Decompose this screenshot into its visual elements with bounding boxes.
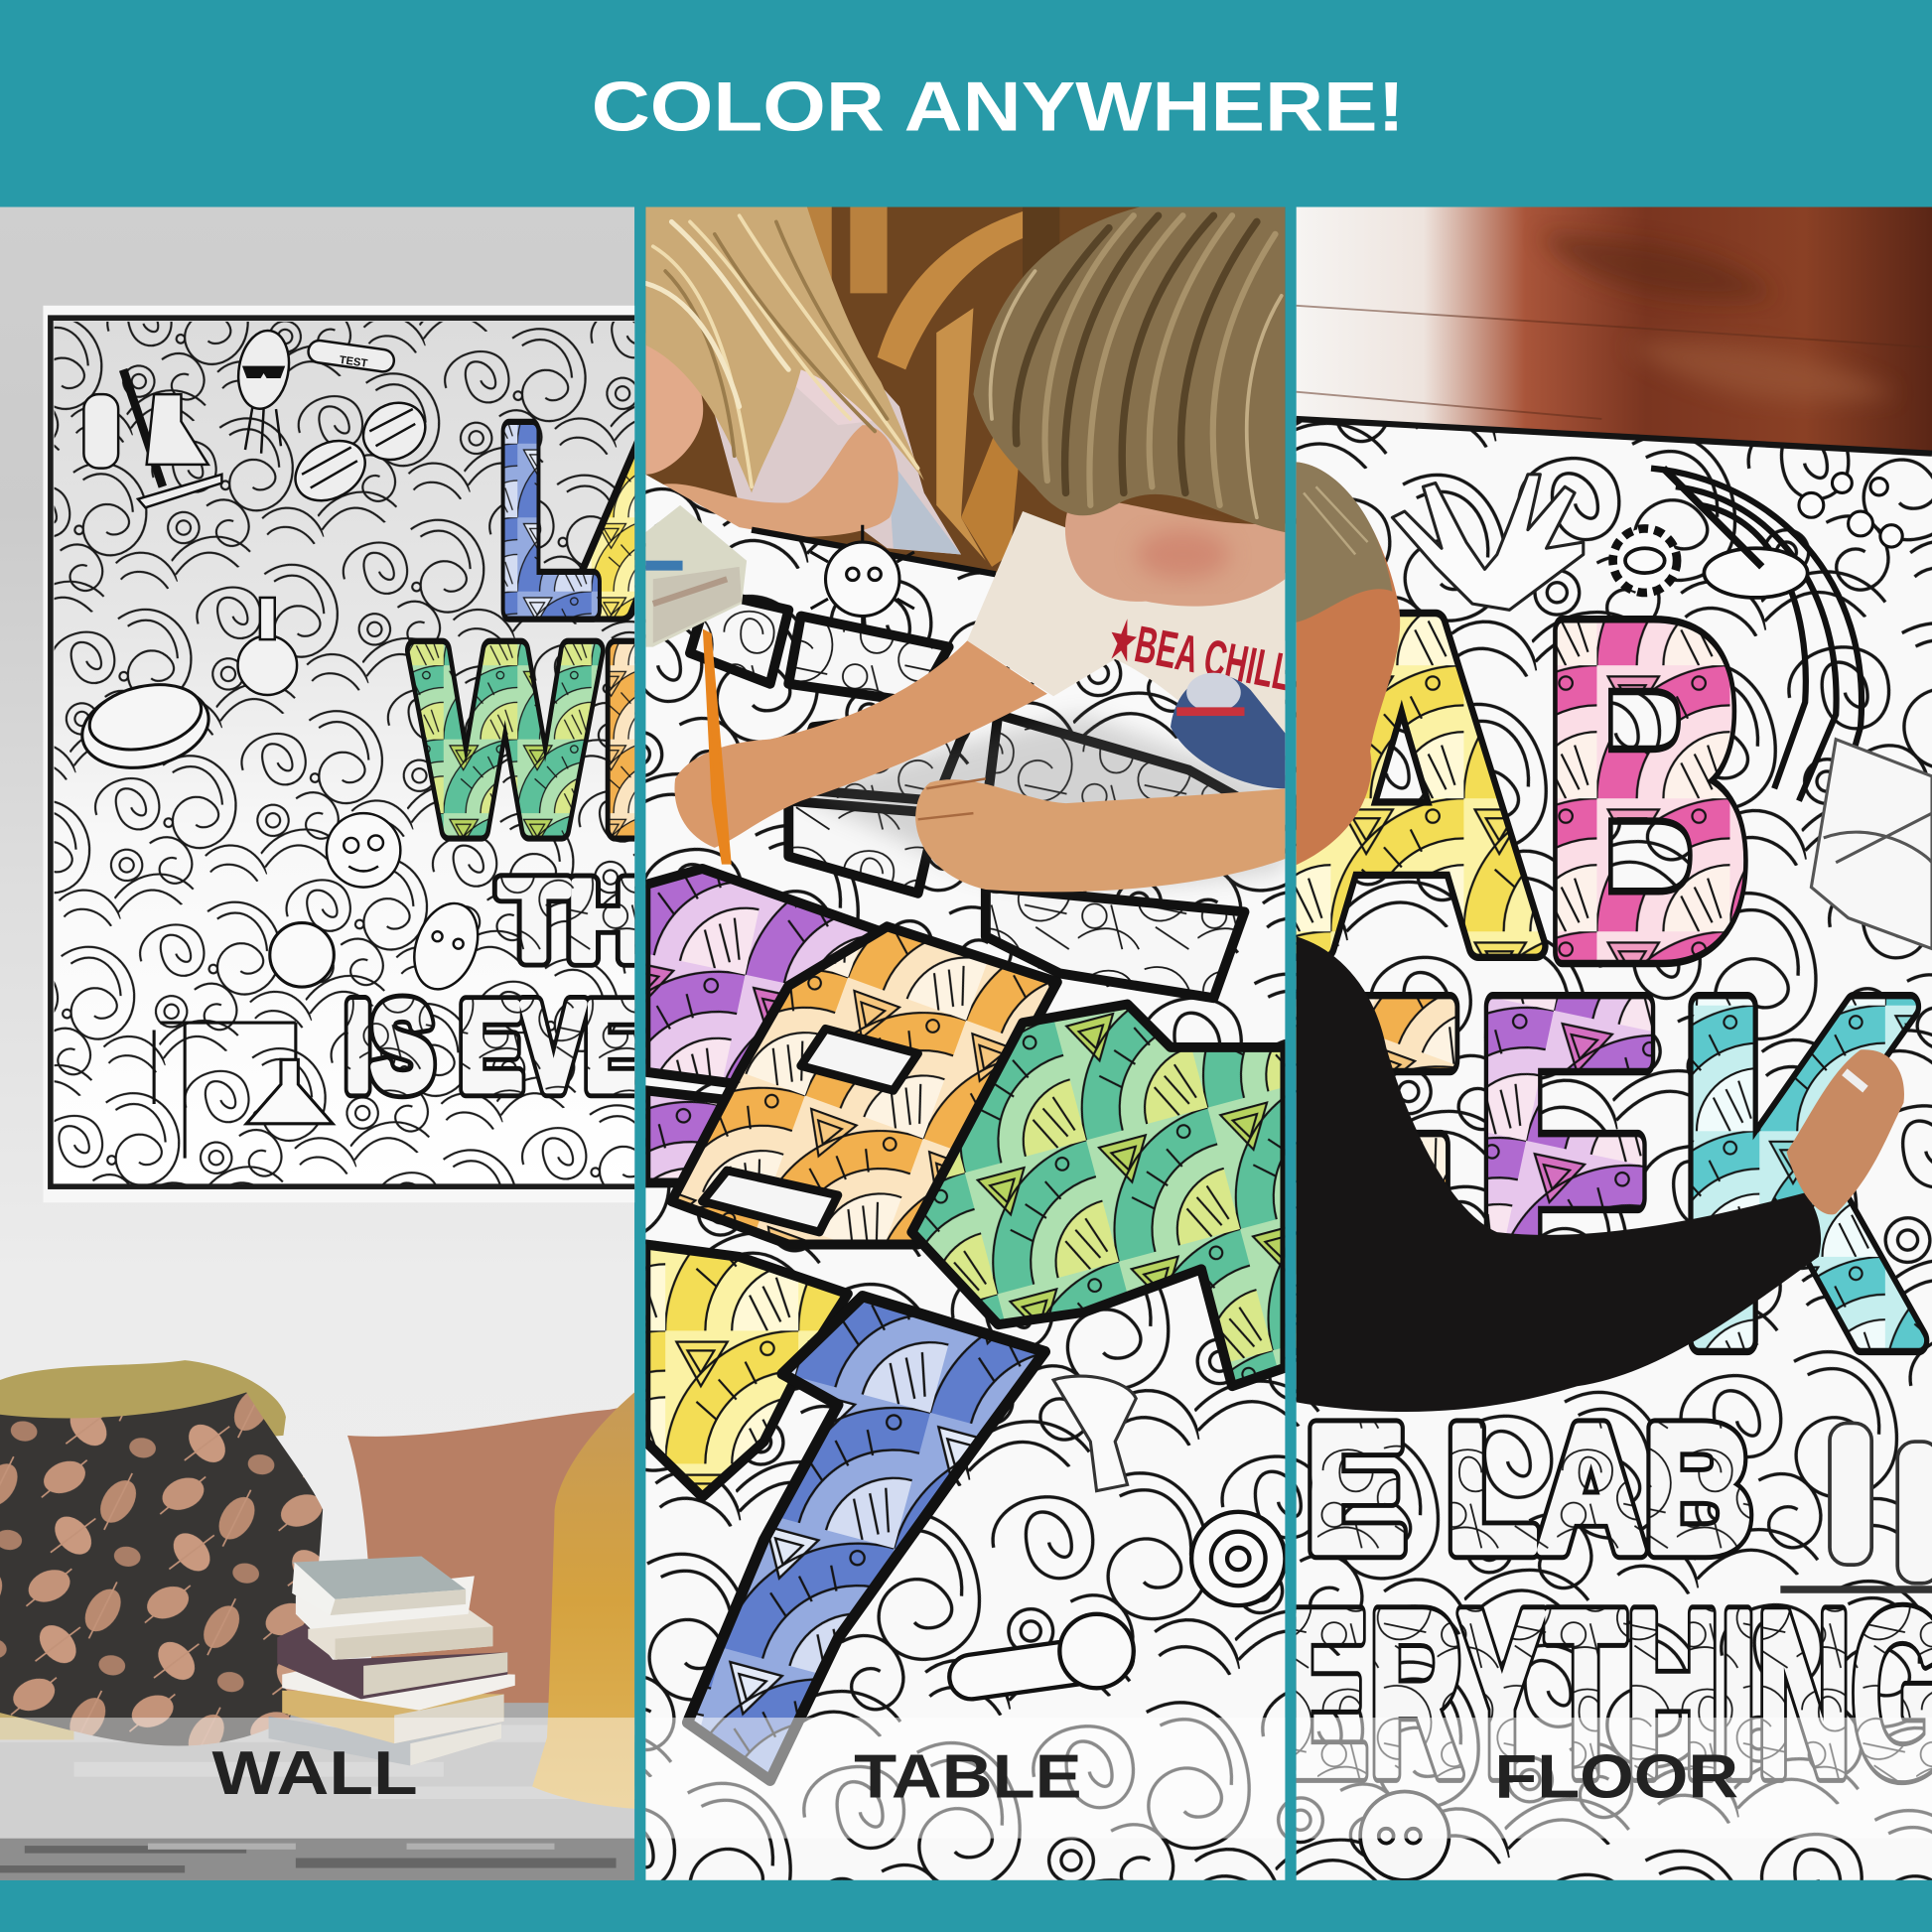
lettering: WEEK: E (1259, 900, 1468, 1444)
poster lettering: LAB: A (569, 375, 791, 665)
olive cloth in basket (0, 1360, 286, 1436)
girl arm (653, 425, 898, 537)
doodle: target swirl (1191, 1512, 1285, 1605)
doodle: dish and pipette (1663, 469, 1808, 598)
poster on floor (1257, 419, 1932, 1880)
lettering: THE LAB: E LAB (1307, 1389, 1752, 1587)
man's black sleeve (1297, 936, 1821, 1412)
poster lettering: LAB: L (497, 375, 599, 665)
poster lettering: LAB: A (569, 375, 791, 665)
lettering: LAB: B (1543, 528, 1752, 1051)
mustard pouf (532, 1392, 634, 1809)
doodle: test tubes on stand (1780, 1423, 1932, 1589)
caption: floor (1297, 1718, 1932, 1839)
floor (0, 1694, 634, 1880)
caption: wall (0, 1718, 634, 1839)
poster on table (645, 475, 1285, 1880)
doodle: beaker (1811, 740, 1932, 949)
panel: floor (1257, 207, 1932, 1880)
boy hair (973, 207, 1285, 532)
lettering: WEEK: E (1473, 900, 1663, 1444)
doodle: test tube with label: TEST (339, 354, 368, 370)
colored letter: blue (688, 1297, 1044, 1780)
plastic crayon box (645, 505, 747, 647)
poster lettering: WEEK: W (414, 595, 598, 885)
girl face (645, 333, 703, 475)
doodle: microscope slide and tubes (83, 369, 221, 507)
poster lettering: THE LAB (492, 873, 635, 968)
hardwood floor (1297, 207, 1932, 454)
poster on wall (44, 306, 635, 1203)
title: COLOR ANYWHERE! (592, 68, 1405, 146)
poster lettering: THE LAB: THE (500, 859, 722, 983)
caption: wall: WALL (211, 1739, 418, 1808)
doodle: heavy arcs beside B (1651, 469, 1862, 813)
wooden chairs background (645, 207, 1285, 577)
girl coloring (645, 207, 961, 554)
man's head (1297, 462, 1400, 865)
doodle: potato character (413, 901, 479, 991)
boy t-shirt (967, 511, 1285, 788)
doodle: gloves (1392, 475, 1584, 610)
poster lettering: WEEK: E (602, 595, 740, 885)
doodle: round flask (238, 598, 297, 695)
caption: table (645, 1718, 1285, 1839)
uncolored letters at top (690, 592, 1244, 998)
terracotta pillow (347, 1405, 634, 1703)
colored letter: purple (645, 869, 878, 1182)
orange pencil (705, 632, 730, 863)
virus doodle (811, 525, 914, 630)
white notch in orange letter (702, 1029, 918, 1232)
leaf-print blanket (0, 1392, 323, 1746)
poster lettering: WEEK: E (602, 595, 740, 885)
panel: table (645, 207, 1297, 1880)
man's hand with marker (1787, 1049, 1904, 1214)
lettering: LAB (1257, 522, 1752, 1051)
poster lettering: IS EVERYTHING (344, 993, 635, 1100)
poster lettering: IS EVERYTHING: IS EVERYTHING (345, 979, 1066, 1116)
lettering: THE LAB: E LAB (1307, 1389, 1752, 1587)
lettering: WEEK (1259, 900, 1922, 1444)
doodle: test tube with label (307, 340, 395, 373)
panel: wall (0, 207, 635, 1880)
doodle: petri dish (80, 683, 210, 769)
caption: table: TABLE (854, 1743, 1082, 1812)
doodle: microbe character (327, 813, 400, 888)
poster lettering: WEEK: W (414, 595, 598, 885)
doodle: flask (1053, 1376, 1136, 1491)
poster lettering: IS EVERYTHING: IS EVERYTHING (345, 979, 1066, 1116)
poster lettering: WEEK (405, 637, 635, 842)
doodle: DNA strand (294, 401, 427, 502)
poster lettering: LAB (500, 419, 635, 622)
lettering: WEEK: E (1259, 900, 1468, 1444)
lettering: LAB: A (1257, 522, 1547, 1045)
whale on shirt (1171, 673, 1285, 788)
stack of books (269, 1556, 515, 1765)
girl hair (645, 207, 924, 492)
doodle: bacterium with sunglasses (236, 330, 290, 454)
shadow beneath boy (788, 715, 1285, 886)
doodle: gear (1613, 528, 1677, 593)
doodle: microbe (1360, 1792, 1449, 1880)
colored letter: green (911, 1004, 1285, 1386)
boy second arm and hand (915, 779, 1285, 892)
lettering: LAB: A (1257, 522, 1547, 1045)
poster lettering: LAB: L (497, 375, 599, 665)
boy coloring (674, 207, 1297, 892)
poster lettering: THE LAB: THE (500, 859, 722, 983)
doodle: pill (946, 1614, 1136, 1702)
boy drawing arm (674, 640, 1047, 848)
colored letter: orange (671, 926, 1057, 1244)
doodle: chemistry flask on stand (154, 923, 334, 1159)
shirt slogan: ★BEA CHILL (1104, 611, 1297, 703)
woven basket base (0, 1713, 73, 1739)
caption: floor: FLOOR (1494, 1743, 1738, 1812)
boy face (1065, 500, 1285, 607)
colored letter: yellow (645, 1244, 848, 1497)
lettering: WEEK: E (1473, 900, 1663, 1444)
doodle: molecule (1799, 474, 1902, 547)
girl dress (702, 351, 961, 554)
wall background (0, 207, 634, 1734)
lettering: LAB: B (1543, 528, 1752, 1051)
